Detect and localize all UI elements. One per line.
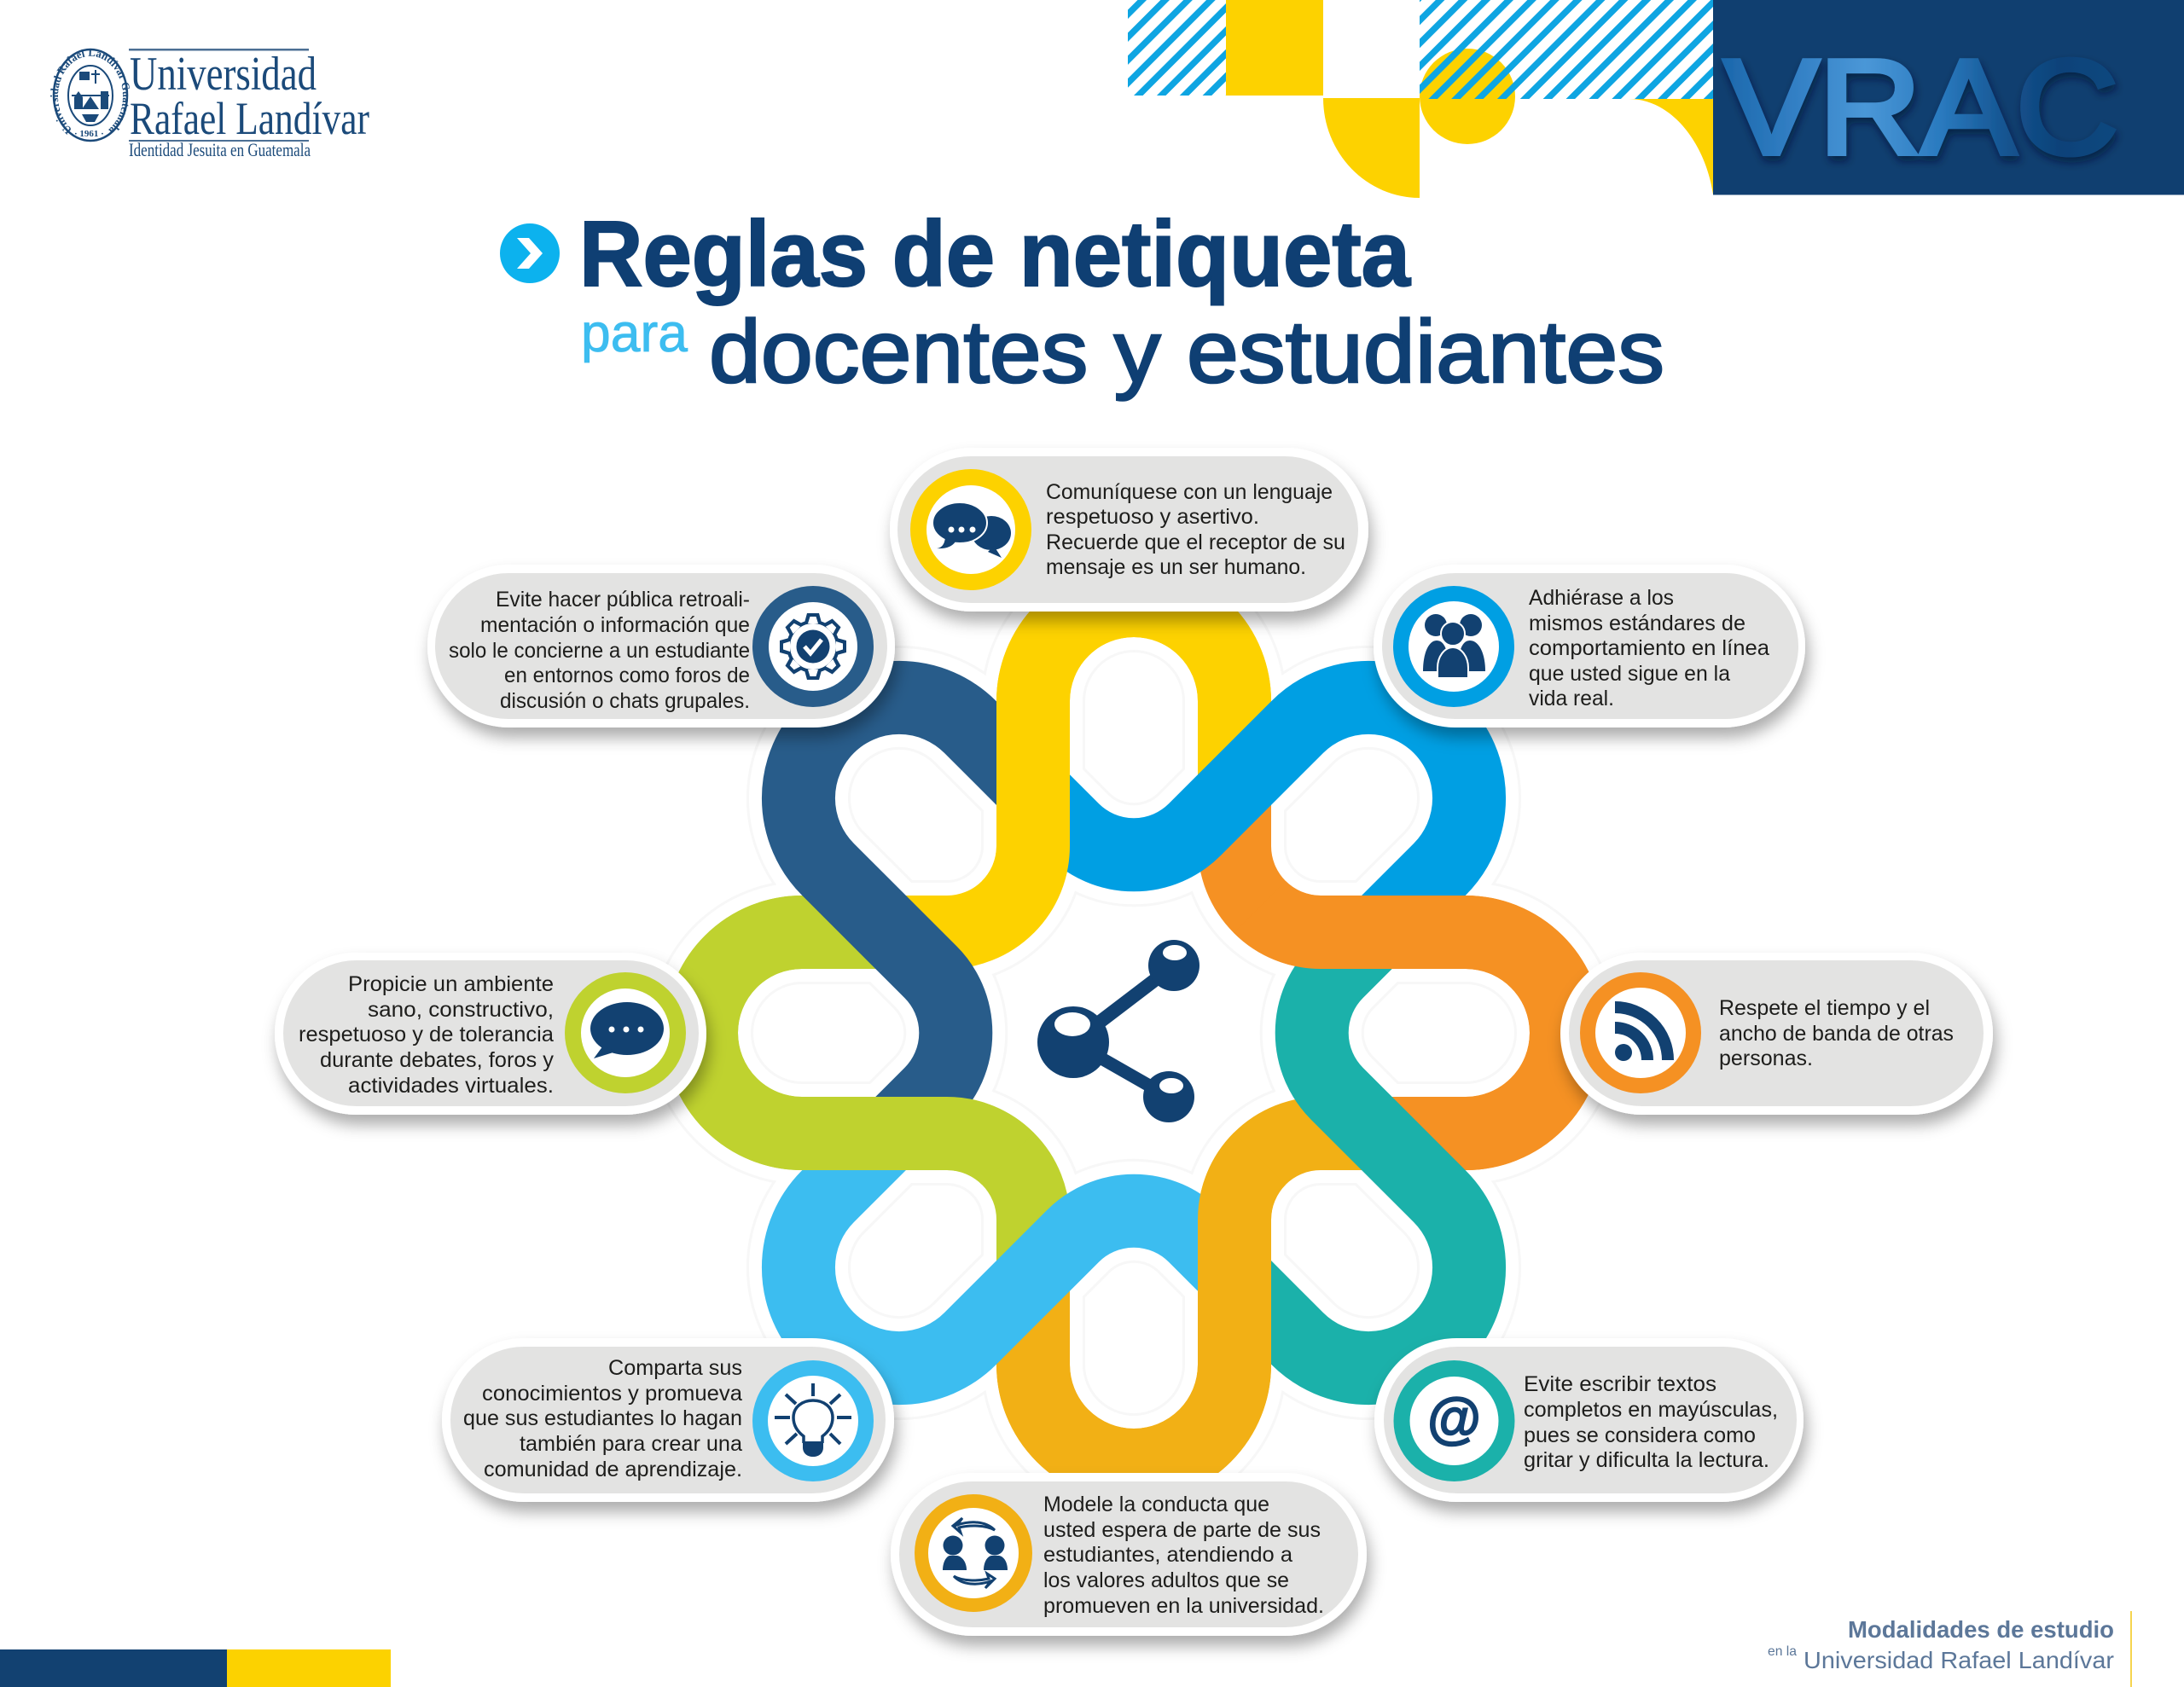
footer line 1: Modalidades de estudio — [1848, 1616, 2114, 1643]
text block: mismos estándares de — [1529, 612, 1745, 635]
yellow quarter circle — [1323, 98, 1420, 198]
heading line 1: Reglas de netiqueta — [579, 202, 1411, 306]
text block: Evite hacer pública retroali- — [496, 588, 750, 612]
text block: Evite escribir textos — [1524, 1372, 1716, 1396]
heading word: para: para — [581, 304, 688, 363]
icon: RSS signal — [1580, 972, 1701, 1093]
VRAC panel — [1713, 0, 2184, 194]
text block: Recuerde que el receptor de su — [1046, 530, 1345, 554]
logo seal: · 1961 · — [74, 129, 104, 139]
text block — [1719, 996, 1954, 1070]
panel: respectful language (top) — [890, 448, 1368, 612]
header decoration — [1128, 0, 1713, 198]
text block — [449, 588, 750, 713]
text block: Adhiérase a los — [1529, 586, 1674, 610]
footer text — [1768, 1611, 2132, 1687]
text block: Respete el tiempo y el — [1719, 996, 1930, 1020]
ribbon: teal, south-east loop — [1134, 932, 1612, 1410]
text block: Comuníquese con un lenguaje — [1046, 480, 1333, 504]
icon: two speech bubbles — [910, 469, 1031, 590]
ribbon: orange, east loop — [1234, 790, 1566, 1133]
ribbon overlap: amber over neighbours — [1033, 1159, 1260, 1465]
ribbon overlap: lime over neighbours — [701, 932, 1008, 1159]
pill background — [275, 953, 706, 1115]
text block: comportamiento en línea — [1529, 636, 1769, 660]
text block: también para crear una — [520, 1432, 742, 1456]
text block: conocimientos y promueva — [482, 1382, 742, 1406]
logo wordmark line 1: Universidad — [130, 48, 317, 101]
ribbon: dark blue, north-west loop — [656, 656, 1134, 1133]
text block: Comparta sus — [608, 1356, 742, 1380]
ribbon: lime, west loop — [701, 932, 1033, 1276]
pill background — [890, 448, 1368, 612]
text block — [299, 972, 554, 1098]
text block: Propicie un ambiente — [348, 972, 554, 996]
text block: personas. — [1719, 1046, 1813, 1070]
panel: model behaviour (bottom) — [891, 1473, 1367, 1636]
text block: promueven en la universidad. — [1043, 1594, 1324, 1618]
text block — [1524, 1372, 1778, 1472]
yellow square — [1226, 0, 1323, 96]
pill background — [427, 565, 895, 728]
pill background — [1374, 565, 1805, 728]
text block: respetuoso y de tolerancia — [299, 1023, 554, 1046]
text block: durante debates, foros y — [320, 1048, 554, 1072]
panel background — [1713, 0, 2184, 194]
logo top rule — [129, 49, 309, 51]
text block: mensaje es un ser humano. — [1046, 555, 1306, 579]
text block — [463, 1356, 742, 1481]
text block: comunidad de aprendizaje. — [484, 1458, 742, 1481]
text block: en entornos como foros de — [504, 664, 750, 687]
footer yellow rule — [2130, 1611, 2132, 1687]
hatch block right — [1420, 0, 1713, 99]
pill background — [1374, 1338, 1804, 1502]
text block — [1046, 480, 1345, 579]
ribbon: amber, south loop — [1033, 1133, 1377, 1465]
text block: solo le concierne a un estudiante — [449, 639, 750, 663]
icon: people exchange — [915, 1494, 1032, 1612]
ribbon overlap: yellow over neighbours — [1008, 600, 1234, 907]
icon: at sign — [1394, 1360, 1515, 1481]
text block: sano, constructivo, — [368, 998, 554, 1022]
text block: Modele la conducta que — [1043, 1493, 1269, 1516]
panel: online behaviour (top-right) — [1374, 565, 1805, 728]
text block — [1529, 586, 1769, 710]
yellow concave corner — [1629, 99, 1713, 194]
heading line 2: docentes y estudiantes — [709, 303, 1664, 402]
text block: que sus estudiantes lo hagan — [463, 1406, 742, 1430]
pill background — [442, 1338, 894, 1502]
text block: vida real. — [1529, 687, 1614, 710]
logo: Universidad Rafael Landívar — [50, 48, 369, 160]
logo bottom rule — [129, 140, 309, 142]
panel: no capitals (bottom-right) — [1374, 1338, 1804, 1502]
icon: chevron bullet — [500, 223, 560, 283]
text block — [1043, 1493, 1324, 1618]
panel: healthy environment (left) — [275, 953, 706, 1115]
logo tagline: Identidad Jesuita en Guatemala — [129, 139, 311, 160]
VRAC wordmark: VRAC — [1724, 32, 2118, 183]
icon: gear with check — [752, 586, 874, 707]
text block: los valores adultos que se — [1043, 1568, 1289, 1592]
yellow circle — [1420, 49, 1515, 144]
pill background — [891, 1473, 1367, 1636]
title block — [500, 202, 1664, 402]
text block: completos en mayúsculas, — [1524, 1398, 1778, 1422]
ribbon knot — [656, 555, 1612, 1510]
icon: group of people — [1393, 586, 1514, 707]
footer bars — [0, 1649, 391, 1687]
icon: speech bubble — [565, 972, 686, 1093]
panel: share knowledge (bottom-left) — [442, 1338, 894, 1502]
logo wordmark line 2: Rafael Landívar — [130, 93, 369, 144]
text block: respetuoso y asertivo. — [1046, 505, 1259, 529]
ribbon overlap: orange over neighbours — [1260, 907, 1566, 1133]
ribbon: yellow, north loop — [891, 600, 1234, 932]
text block: mentación o información que — [480, 613, 750, 637]
ribbon: sky blue, south-west loop — [757, 1033, 1234, 1510]
icon: light bulb — [752, 1360, 874, 1481]
logo seal: Universidad Rafael Landívar Guatemala — [50, 49, 130, 135]
pill background — [1560, 953, 1993, 1115]
text block: estudiantes, atendiendo a — [1043, 1543, 1292, 1567]
text block: gritar y dificulta la lectura. — [1524, 1448, 1769, 1472]
ribbon halo — [656, 555, 1612, 1510]
text block: actividades virtuales. — [348, 1074, 554, 1098]
text block: que usted sigue en la — [1529, 662, 1730, 686]
text block: discusión o chats grupales. — [500, 689, 750, 713]
hatch block left — [1128, 0, 1226, 96]
panel: time and bandwidth (right) — [1560, 953, 1993, 1115]
panel: private feedback (top-left) — [427, 565, 895, 728]
footer line 2: Universidad Rafael Landívar — [1804, 1647, 2114, 1673]
text block: ancho de banda de otras — [1719, 1022, 1954, 1046]
icon: central share symbol — [1037, 940, 1199, 1122]
text block: pues se considera como — [1524, 1423, 1756, 1447]
text block: usted espera de parte de sus — [1043, 1518, 1321, 1542]
icon: at sign: @ — [1427, 1386, 1481, 1449]
ribbon: blue, north-east loop — [1033, 555, 1511, 1033]
footer small words: en la — [1768, 1644, 1797, 1659]
